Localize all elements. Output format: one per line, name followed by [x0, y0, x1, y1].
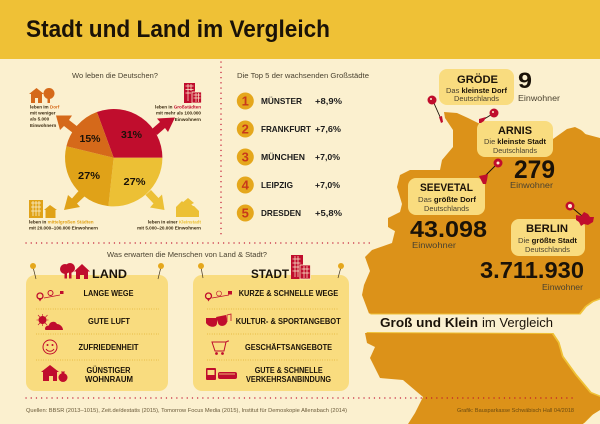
label: Dorf: als 5.000: [30, 116, 50, 122]
callout: Gröde: Deutschlands: [454, 96, 500, 103]
row 4: [237, 176, 340, 194]
row 2: +7,6%: [315, 124, 341, 134]
pins: [198, 263, 344, 278]
arrow: Großstadt: [152, 118, 175, 135]
label: Kleinstadt: leben in einer Kleinstadt: [148, 220, 201, 224]
pins: [30, 263, 164, 279]
credit: Grafik: Bausparkasse Schwäbisch Hall 04/2018: [457, 408, 574, 414]
row 4: LEIPZIG: [261, 180, 293, 190]
row 2: [237, 120, 341, 138]
label: Großstädte: leben in Großstädten: [155, 104, 201, 110]
callout: Arnis: Deutschlands: [493, 148, 538, 155]
callout: Gröde: [439, 68, 560, 105]
arrow: Kleinstadt: [146, 190, 164, 210]
icon: short route: [206, 291, 232, 302]
callout: Berlin: Die größte Stadt: [518, 238, 578, 245]
row 1: MÜNSTER: [261, 96, 302, 106]
pin: Berlin: [566, 202, 594, 226]
arrow: mittelgroße Stadt: [64, 190, 85, 210]
row 3: [237, 148, 340, 166]
icon: house with money bag: [41, 365, 68, 382]
text: lange Wege: LANGE WEGE: [84, 289, 134, 298]
pin: Gröde: [428, 96, 443, 123]
pin: Seevetal: [479, 158, 502, 184]
label: Dorf: Einwohnern: [30, 123, 56, 128]
pie chart: 27%: [124, 176, 146, 188]
map heading: im Vergleich: [482, 315, 553, 330]
row 3: +7,0%: [315, 152, 340, 162]
row 4: 4: [242, 178, 250, 192]
row 1: +8,9%: [315, 96, 342, 106]
section: Top 5: [237, 73, 369, 222]
callout: Seevetal: Das größte Dorf: [418, 197, 477, 204]
section: Wo leben die Deutschen: [29, 73, 202, 230]
text: gute Luft: GUTE LUFT: [88, 317, 130, 326]
callout: Berlin: BERLIN: [526, 223, 568, 235]
icon: sun and cloud: [36, 314, 63, 330]
callout: Seevetal: SEEVETAL: [420, 182, 473, 194]
row 2: 2: [242, 122, 249, 136]
row 1: 1: [242, 94, 249, 108]
callout: Arnis: Die kleinste Stadt: [484, 139, 547, 146]
icon: high-rise: [184, 83, 202, 103]
callout: Berlin: 3.711.930: [480, 257, 584, 283]
text: Zufriedenheit: ZUFRIEDENHEIT: [78, 343, 139, 352]
heading: Land: LAND: [92, 267, 127, 281]
label: Kleinstadt: mit 5.000–20.000 Einwohnern: [137, 226, 201, 230]
text: Verkehrsanbindung: VERKEHRSANBINDUNG: [246, 375, 331, 384]
callout: Seevetal: 43.098: [410, 216, 487, 242]
callout: Berlin: Deutschlands: [525, 247, 571, 254]
row 4: +7,0%: [315, 180, 340, 190]
callout: Gröde: Einwohner: [518, 94, 560, 103]
callout: Gröde: 9: [518, 68, 532, 93]
text: günstiger Wohnraum: WOHNRAUM: [85, 375, 133, 384]
row 3: MÜNCHEN: [261, 152, 305, 162]
icon: village: [29, 88, 54, 103]
label: Dorf: leben im Dorf: [30, 104, 59, 110]
header banner: [0, 0, 600, 59]
label: mittelgroße Städte: mit 20.000–100.000 Einwohnern: [29, 226, 98, 230]
row 3: 3: [242, 150, 249, 164]
title: Stadt und Land im Vergleich: [26, 16, 330, 43]
arrow: Dorf: [56, 116, 78, 133]
label: Großstädte: mit mehr als 100.000: [156, 110, 201, 116]
callout: Arnis: 279: [514, 156, 555, 184]
icon: small town: [176, 198, 199, 217]
map heading: [380, 315, 553, 330]
text: günstiger Wohnraum: GÜNSTIGER: [86, 366, 131, 375]
heading: Wo leben die Deutschen?: [72, 73, 158, 80]
callout: Berlin: Einwohner: [542, 283, 583, 292]
icon: smiley: [43, 340, 57, 354]
icon: bus and train: [206, 368, 237, 380]
row 5: DRESDEN: [261, 208, 301, 218]
sources: Quellen: BBSR (2013–1015), Zeit.de/destatis (2015), Tomorrow Focus Media (2015), Institut für Demoskopie Allensbach (2014): [26, 408, 347, 414]
callout: Seevetal: Einwohner: [412, 241, 456, 250]
text: Kultur und Sport: KULTUR- & SPORTANGEBOT: [236, 317, 341, 326]
label: Dorf: mit weniger: [30, 110, 56, 116]
panel: Land: [26, 263, 168, 391]
callout: Gröde: Das kleinste Dorf: [446, 88, 508, 95]
map of Germany: [362, 112, 600, 424]
heading: Stadt: STADT: [251, 267, 290, 281]
pie chart: 31%: [121, 129, 143, 141]
icon: shopping cart: [212, 341, 229, 354]
callout: Arnis: [477, 121, 555, 190]
row 5: [237, 204, 342, 222]
row 5: 5: [242, 206, 249, 220]
icon: trees and house: [60, 263, 90, 279]
text: Geschäftsangebote: GESCHÄFTSANGEBOTE: [245, 343, 333, 352]
pie chart: 15%: [80, 133, 101, 145]
callout: Seevetal: Deutschlands: [424, 206, 470, 213]
callout: Berlin: [480, 219, 585, 292]
callout: Arnis: ARNIS: [498, 125, 532, 137]
label: Großstädte: Einwohnern: [175, 117, 201, 122]
icon: masks and note: [206, 314, 231, 327]
callout: Gröde: GRÖDE: [457, 73, 498, 86]
map heading: Groß und Klein: [380, 315, 478, 330]
panel: Stadt: [193, 255, 349, 391]
callout: Arnis: Einwohner: [510, 181, 553, 190]
row 2: FRANKFURT: [261, 124, 312, 134]
question heading: Was erwarten die Menschen von Land & Stadt?: [107, 252, 267, 259]
text: Verkehrsanbindung: GUTE & SCHNELLE: [255, 366, 323, 375]
icon: mid-sized city: [29, 200, 57, 218]
heading: Die Top 5 der wachsenden Großstädte: [237, 73, 369, 80]
callout: Seevetal: [408, 178, 487, 250]
label: mittelgroße Städte: leben in mittelgroßen Städten: [29, 220, 94, 224]
icon: high-rise: [291, 255, 310, 279]
pin: Arnis: [479, 108, 498, 123]
icon: long route: [37, 290, 64, 302]
pie chart: [65, 109, 162, 206]
text: kurze Wege: KURZE & SCHNELLE WEGE: [239, 289, 339, 298]
dotted separators: [26, 62, 577, 398]
row 1: [237, 92, 342, 110]
pie chart: 27%: [78, 170, 101, 182]
row 5: +5,8%: [315, 208, 342, 218]
